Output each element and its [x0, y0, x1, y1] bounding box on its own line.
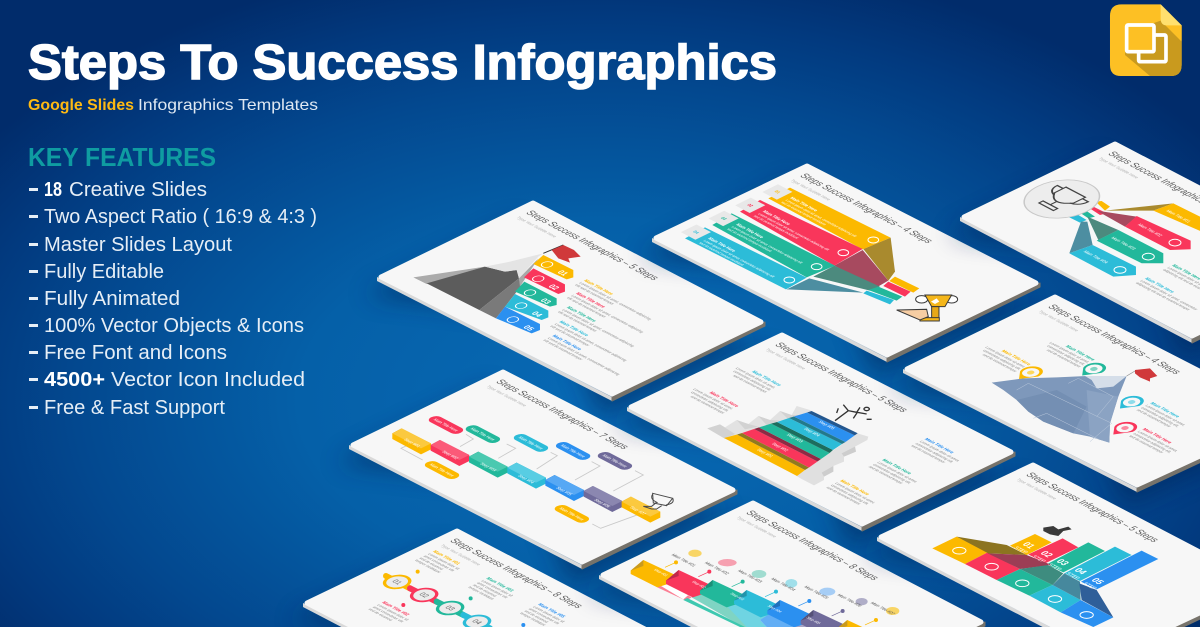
slide text: Main Title Here: [564, 306, 598, 323]
slide text: Lorem ipsum dolor sit amet, consectetur adipiscing elit: [757, 213, 830, 251]
panel: slide 4 steps blue mountain: [891, 297, 1200, 507]
slide base: [640, 166, 1040, 376]
slide text and rings: Type Your Subtitle Here: [439, 544, 482, 566]
slide text and rings: tempor incididunt: [467, 585, 496, 601]
slide text: 01: [555, 269, 571, 277]
slide base: [365, 203, 765, 417]
feature: 18 creative slides: Creative Slides: [69, 179, 207, 201]
slide text: sed do eiusmod tempor: [867, 465, 905, 485]
slide text: elit sed do eiusmod tempor: [542, 339, 585, 361]
panel: slide 8 steps bars: [587, 503, 985, 627]
slide text: STEP: [1046, 563, 1063, 572]
slide text and rings: tempor incididunt: [414, 559, 443, 574]
slide text and rings: 03: [443, 605, 457, 612]
leaders and icons: [665, 550, 899, 625]
slide text and pins: [956, 303, 1200, 460]
slide text: Steps Success Infographics – 5 Steps: [523, 209, 661, 282]
slide text and rings: amet consectetur elit: [422, 554, 457, 572]
slide text: [678, 171, 935, 302]
trophy icon: [1009, 172, 1115, 226]
feature: free font: Free Font and Icons: [44, 342, 227, 364]
slide text and rings: Main Title #01: [431, 550, 462, 566]
slide text and rings: sed do eiusmod: [367, 607, 394, 621]
slide text: Lorem ipsum dolor sit amet,: [834, 481, 877, 504]
panel: slide 7 steps: [337, 372, 737, 585]
slide text: Main Title Here: [601, 454, 629, 468]
slide text: Main Title #06: [836, 593, 864, 608]
slide text and pins: Main Title Here: [1063, 345, 1097, 362]
folded step blocks: [932, 526, 1158, 627]
slide text: elit sed do eiusmod tempor: [556, 310, 600, 333]
slide text: Main Title #02: [1136, 223, 1164, 237]
slide text and rings: amet consectetur elit: [476, 581, 510, 599]
slide text: Main Title Here: [707, 391, 741, 408]
slide text: Step #02: [690, 580, 708, 589]
slide text: 04: [529, 310, 545, 318]
slide text: Main Title #05: [803, 585, 831, 600]
slide text: Main Title #07: [869, 601, 897, 616]
gray stair backing: [707, 406, 868, 485]
slide text: Main Title Here: [838, 479, 871, 496]
panel: slide 4 steps trophy circle: [948, 144, 1200, 357]
heading block: [28, 36, 777, 114]
slide text: Step #04: [802, 427, 822, 437]
slide text: [641, 509, 925, 627]
slide text: Lorem ipsum dolor sit amet, consectetur adipiscing: [570, 294, 645, 333]
slide text and rings: tempor incididunt: [519, 611, 548, 627]
slide text: sed do eiusmod tempor: [732, 374, 770, 394]
slide text and rings: Main Title #03: [484, 577, 515, 593]
slide text and rings: Lorem ipsum dolor sit: [532, 605, 567, 624]
slide text: 03: [719, 216, 729, 221]
slide text: Lorem ipsum dolor sit amet, consectetur adipiscing: [561, 308, 636, 348]
slide text: Main Title #04: [1082, 250, 1110, 264]
slide text and pins: sed do eiusmod tempor: [981, 353, 1019, 373]
slide text: Lorem ipsum dolor sit amet, consectetur adipiscing: [546, 336, 622, 376]
slide text: elit sed do eiusmod tempor: [566, 296, 609, 319]
achiever icon: [835, 405, 872, 421]
slide text and pins: Main Title Here: [1140, 427, 1174, 445]
slide text: 02: [546, 283, 562, 291]
slide text: 04: [691, 230, 701, 235]
slide text: Steps Success Infographics – 4 Steps: [797, 172, 935, 245]
panel: slide 8 steps rings: [291, 531, 689, 627]
slide text: Main Title Here: [469, 427, 497, 442]
slide text: elit sed do eiusmod tempor: [574, 283, 617, 306]
slide text: Main Title #02: [703, 561, 731, 576]
slide text: sed do eiusmod tempor incididunt: [698, 242, 745, 266]
slide text: Step #07: [628, 506, 648, 516]
panel: slide 5 steps stairs: [615, 335, 1015, 547]
slide text: 01: [1020, 541, 1038, 550]
panel: slide 5 steps folded stairs: [865, 465, 1200, 627]
slide text and pins: consectetur adipiscing elit,: [982, 349, 1023, 371]
slide text and rings: Lorem ipsum dolor sit: [427, 552, 462, 571]
slide text: Step #05: [817, 420, 837, 430]
slide text: 03: [1054, 558, 1072, 567]
slide text: [409, 209, 737, 378]
slide text: Main Title Here: [750, 370, 783, 387]
slide text: Lorem ipsum dolor sit amet, consectetur adipiscing elit: [730, 226, 804, 264]
slide text: Steps Success Infographics – 8 Steps: [743, 509, 881, 582]
slide text: Lorem ipsum dolor sit amet,: [734, 366, 778, 389]
slide text: Step #01: [403, 438, 422, 448]
slide base: [948, 144, 1200, 357]
slide text: Lorem ipsum dolor sit amet, consectetur adipiscing: [578, 281, 653, 321]
slide text: Main Title Here: [1143, 277, 1176, 294]
slide text: adipiscing elit sed do eiusmod tempor: [1135, 281, 1192, 312]
feature: aspect ratio: Two Aspect Ratio ( 16:9 & 4:3 ): [44, 206, 317, 228]
slide text: 05: [521, 324, 537, 332]
slide base: [291, 531, 689, 627]
slide text and rings: sed do eiusmod: [418, 556, 445, 570]
slide text: sed do eiusmod tempor: [689, 395, 727, 415]
slide text: 02: [1038, 550, 1056, 559]
subtitle: Infographics Templates: [138, 97, 318, 114]
slide text: Step #04: [766, 604, 784, 614]
slide text: STEP: [1012, 546, 1029, 555]
slide text: 02: [746, 203, 755, 208]
step blocks: [392, 428, 660, 523]
feature: vector icons count: Vector Icon Included: [111, 369, 305, 391]
slide text: sed do eiusmod tempor incididunt: [780, 201, 827, 226]
slide text and pins: Type Your Subtitle Here: [1037, 310, 1080, 332]
slide text: sed do eiusmod tempor: [910, 444, 948, 464]
slide text and rings: 02: [417, 592, 431, 599]
slide text: Main Title Here: [707, 237, 738, 253]
slide text: Type Your Subtitle Here: [1097, 157, 1140, 179]
slide text and pins: sed do eiusmod tempor: [1045, 348, 1084, 368]
slide text: Lorem ipsum dolor sit amet, consectetur adipiscing elit: [702, 239, 776, 278]
slide text: Main Title Here: [550, 334, 583, 352]
slide text and pins: consectetur adipiscing elit,: [1140, 406, 1181, 428]
slide base: [337, 372, 737, 585]
slide text: STEP: [1064, 572, 1081, 581]
slide text: Type Your Subtitle Here: [764, 348, 807, 370]
slide text: Step #06: [593, 498, 612, 508]
slide text and pins: Lorem ipsum dolor sit amet,: [1048, 341, 1092, 364]
slide text and rings: 04: [470, 618, 484, 626]
slide text and pins: sed do eiusmod tempor: [1128, 434, 1166, 454]
slide text and rings: Lorem ipsum dolor sit: [480, 579, 516, 598]
trophy icon: [643, 493, 673, 509]
slide text: Step #02: [770, 442, 790, 452]
slide text and pins: sed do eiusmod tempor: [1135, 408, 1174, 428]
slide text: Main Title Here: [735, 223, 766, 239]
slide text: sed do eiusmod tempor: [825, 486, 863, 506]
slide text and rings: sed do eiusmod: [523, 609, 550, 623]
slide text: consectetur adipiscing elit,: [829, 484, 871, 505]
slide text: Steps Success Infographics – 7 Steps: [493, 378, 631, 451]
slide text: Main Title Here: [557, 320, 590, 337]
slide text: Type Your Subtitle Here: [485, 385, 528, 407]
subtitle highlight: Google Slides: [28, 97, 134, 114]
slide base: [615, 335, 1015, 547]
slide text and pins: Main Title Here: [1148, 401, 1181, 419]
slide text: Main Title #03: [736, 569, 764, 584]
feature: 18 creative slides: 18: [44, 179, 62, 201]
connector lines: [401, 434, 643, 528]
trophy and hand: [897, 295, 958, 321]
slide text: Type Your Subtitle Here: [515, 216, 558, 238]
feature: animated: Fully Animated: [44, 288, 180, 310]
slide base: [587, 503, 985, 627]
slide text: Main Title #03: [1110, 236, 1138, 251]
slide text: Main Title Here: [432, 418, 460, 432]
slide text and rings: Lorem ipsum dolor sit: [376, 603, 411, 622]
slide text: Main Title Here: [574, 292, 607, 309]
slide text: Type Your Subtitle Here: [789, 179, 832, 201]
slide text: Lorem ipsum dolor sit amet,: [692, 387, 735, 410]
slide text and rings: 01: [390, 579, 404, 586]
slide text: Lorem ipsum dolor sit amet, consectetur: [1139, 279, 1200, 311]
slide text: Main Title #01: [670, 553, 698, 568]
slide text: STEP: [1081, 582, 1098, 591]
slide text: Step #03: [729, 592, 746, 601]
slide text: consectetur adipiscing elit,: [914, 442, 956, 464]
slide text and rings: amet consectetur elit: [371, 605, 406, 623]
bars and fade areas: [631, 560, 879, 627]
slide text and pins: Main Title Here: [999, 349, 1033, 367]
slide text: Main Title Here: [428, 463, 456, 478]
slide text: Main Title Here: [582, 279, 615, 296]
staircase: [707, 406, 868, 485]
mountain and tags: [413, 245, 581, 333]
ring leader dots: [401, 570, 525, 627]
blue mountain: [992, 368, 1157, 443]
slide text and pins: Lorem ipsum dolor sit amet,: [1144, 404, 1188, 427]
slide text: [994, 150, 1200, 313]
slide text: consectetur adipiscing elit,: [732, 370, 773, 391]
slide text: Main Title Here: [559, 444, 587, 458]
slide text: sed do eiusmod tempor incididunt: [752, 215, 800, 239]
slide text: Lorem ipsum dolor sit amet,: [918, 440, 962, 462]
feature: editable: Fully Editable: [44, 261, 164, 283]
slide text: elit sed do eiusmod tempor: [549, 325, 592, 347]
feature: master slides: Master Slides Layout: [44, 234, 232, 256]
panel: slide 5 steps mountain: [365, 203, 765, 417]
slide text: 05: [1089, 577, 1107, 586]
funnel bars: [685, 188, 919, 304]
slide text: Step #01: [755, 448, 775, 458]
slide text: Step #03: [479, 462, 498, 472]
slide text: Lorem ipsum dolor sit amet, consectetur adipiscing: [553, 322, 629, 362]
feature: support: Free & Fast Support: [44, 397, 225, 419]
slide text: Main Title Here: [558, 507, 586, 521]
key features heading: KEY FEATURES: [28, 142, 216, 172]
slide text: 01: [773, 190, 782, 194]
slide text: Lorem ipsum dolor sit amet, consectetur adipiscing elit: [784, 199, 858, 238]
slide text and pins: consectetur adipiscing elit,: [1046, 344, 1087, 366]
slide text and pins: Lorem ipsum dolor sit amet,: [984, 346, 1027, 368]
slide text: [660, 341, 986, 509]
slide text: Steps Success Infographics – 5 Steps: [1023, 471, 1161, 544]
key features list: [28, 142, 317, 419]
slide text: 03: [538, 297, 554, 305]
slide text: Type Your Subtitle Here: [1015, 478, 1058, 500]
slide text: [946, 471, 1179, 591]
slide text and rings: Steps Success Infographics – 8 Steps: [447, 537, 585, 610]
slide text: consectetur adipiscing elit,: [872, 463, 913, 485]
slide text: Step #05: [805, 616, 822, 625]
slide text: consectetur adipiscing elit,: [689, 391, 731, 412]
icon: Google Slides logo: [1110, 4, 1182, 76]
panel: slide 4 steps funnel: [640, 166, 1040, 376]
slide text: Step #03: [785, 433, 805, 443]
slide text: Lorem ipsum dolor sit amet,: [876, 461, 919, 483]
feature dashes: [29, 188, 38, 409]
slide text and pins: Steps Success Infographics – 4 Steps: [1045, 303, 1183, 376]
slide text: Main Title Here: [880, 458, 913, 476]
slide text: Step #05: [555, 486, 574, 496]
slide text: Main Title Here: [789, 196, 820, 212]
slide text: 04: [1072, 567, 1090, 576]
slide text: Step #04: [517, 474, 536, 484]
slide text: [376, 378, 706, 547]
slide text: Step #02: [441, 450, 460, 460]
slide text and rings: Main Title #02: [380, 601, 411, 617]
slide text and pins: Lorem ipsum dolor sit amet,: [1136, 430, 1180, 453]
title: Steps To Success Infographics: [28, 36, 777, 90]
slide text and rings: amet consectetur elit: [527, 607, 562, 625]
slide base: [891, 297, 1200, 507]
feature: vector objects: 100% Vector Objects & Icons: [44, 315, 304, 337]
chevron bars: [1067, 201, 1200, 277]
slide text: sed do eiusmod tempor incididunt: [726, 228, 773, 252]
slide text and pins: consectetur adipiscing elit,: [1132, 432, 1174, 454]
slide text: Step #01: [652, 568, 670, 577]
slide text and rings: [340, 537, 593, 627]
feature: vector icons count: [44, 369, 305, 391]
slide text: Main Title #04: [770, 577, 797, 592]
slide text: Type Your Subtitle Here: [735, 516, 778, 538]
slide text: STEP: [1030, 555, 1047, 564]
ring chain: [386, 576, 490, 627]
slide text and rings: sed do eiusmod: [471, 583, 498, 597]
slide text: Main Title Here: [761, 210, 792, 226]
slide text: Main Title Here: [517, 436, 545, 450]
slide text: Steps Success Infographics – 5 Steps: [772, 341, 910, 414]
feature: vector icons count: 4500+: [44, 369, 105, 391]
slide text: Main Title #01: [1165, 209, 1192, 223]
slide text and rings: Main Title #05: [536, 603, 567, 619]
slide text: Main Title Here: [922, 437, 956, 455]
slide base: [865, 465, 1200, 627]
